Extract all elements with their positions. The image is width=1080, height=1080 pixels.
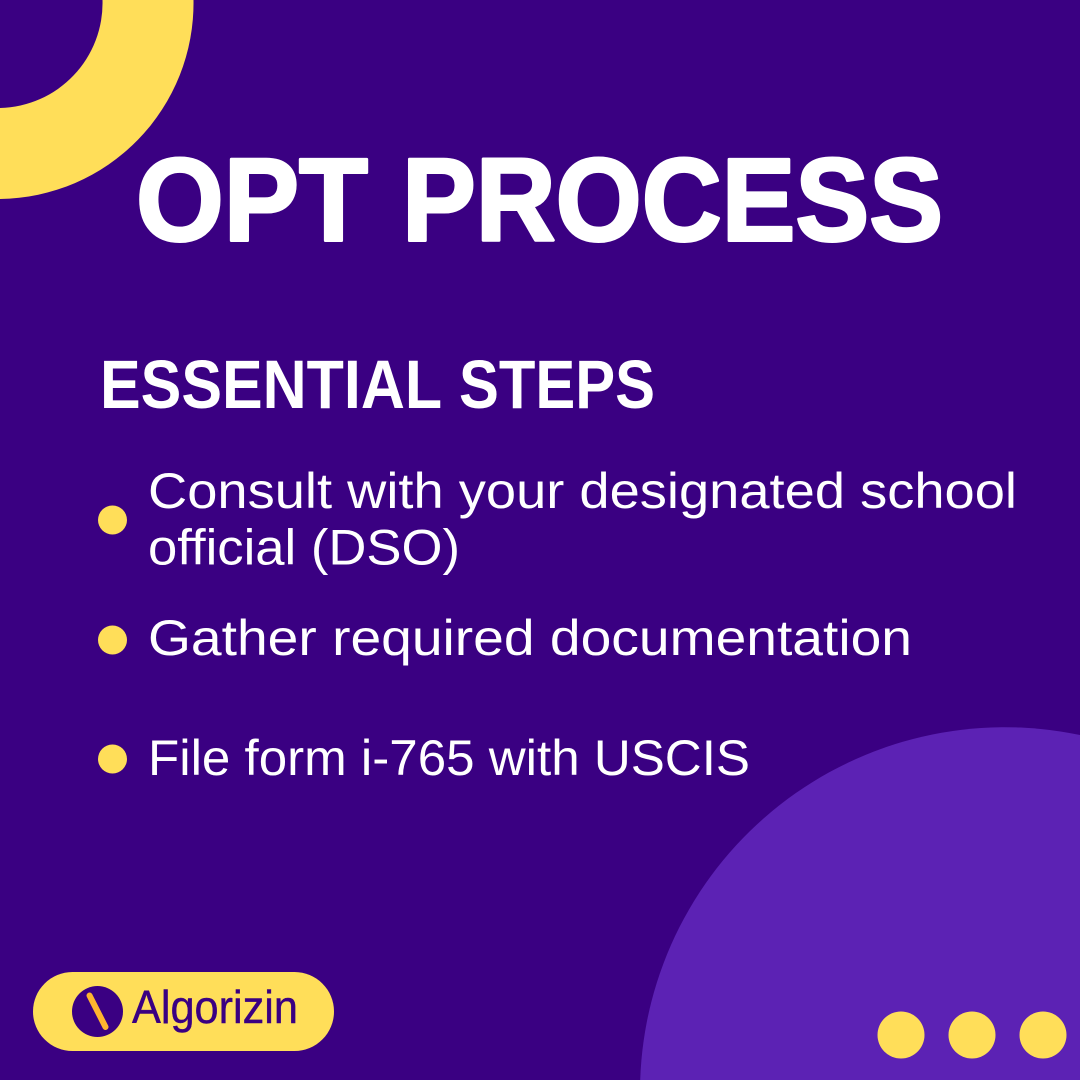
bullet 3: [98, 744, 127, 774]
step 3 text: File form i-765 with USCIS: [148, 730, 750, 786]
heading: essential steps: STEPS: [459, 346, 655, 423]
decorative purple circle, bottom right: [640, 727, 1080, 1080]
heading: essential steps: ESSENTIAL: [100, 346, 441, 423]
logo wordmark: Algorizin: [132, 981, 298, 1033]
step 2: gather documentation: [98, 610, 912, 666]
badge background: [33, 972, 334, 1051]
step 1 text: Consult with your designated school: [148, 463, 1017, 519]
three yellow dots: [878, 1012, 1066, 1058]
step 2 text: Gather required documentation: [148, 610, 912, 666]
title: PROCESS: [402, 134, 943, 266]
decorative yellow ring, top left: [0, 0, 194, 199]
step 1: consult DSO: [98, 463, 1031, 576]
logo icon: [72, 986, 123, 1037]
bullet 1: [98, 506, 127, 534]
logo badge: Algorizin: [33, 972, 334, 1051]
bullet 2: [98, 626, 127, 654]
title: OPT: [136, 134, 368, 266]
step 3: file form: [98, 730, 750, 786]
step 1 text: official (DSO): [148, 520, 460, 576]
